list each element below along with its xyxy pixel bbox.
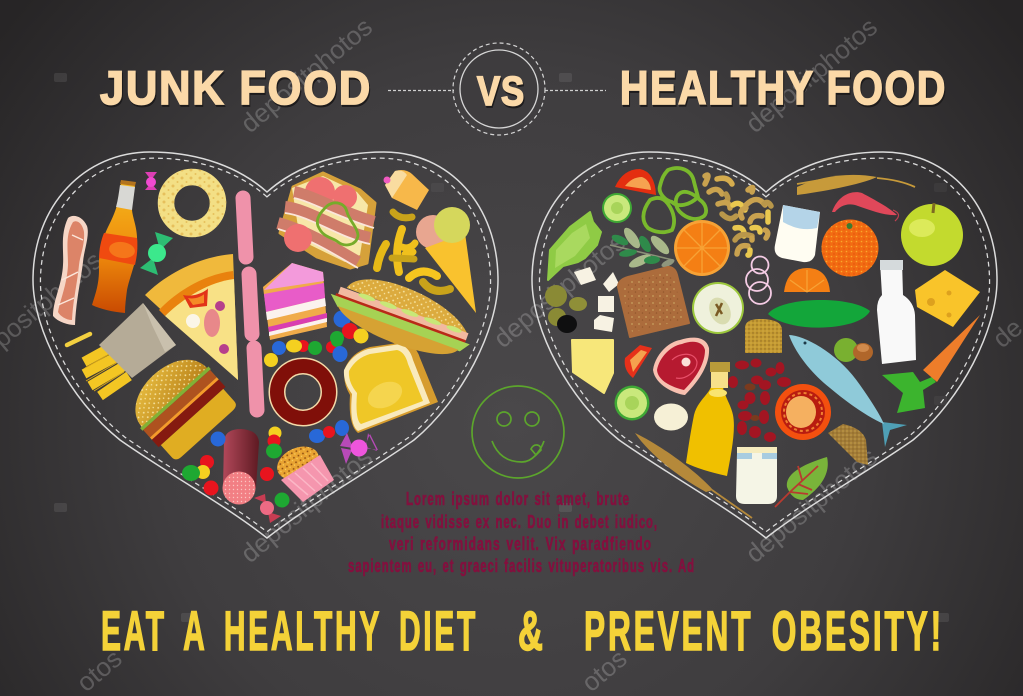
heart outline	[33, 152, 498, 538]
icon: chocolate donut	[277, 366, 329, 418]
icon: cucumber	[768, 300, 870, 328]
lorem ipsum text: Lorem ipsum dolor sit amet, brute	[406, 489, 630, 509]
watermarks: depositphotos	[235, 12, 378, 139]
icon: carrot	[882, 315, 980, 413]
icon: cream cake cube	[384, 170, 429, 210]
watermarks: depositphotos	[740, 442, 883, 569]
icon: soda bottle	[92, 180, 137, 313]
panel: junk food heart	[33, 152, 498, 538]
icon: cucumber slice	[602, 193, 632, 223]
icon: cucumber slice lower	[614, 386, 650, 420]
icon: yogurt jar	[736, 447, 777, 504]
lorem ipsum text: itaque vidisse ex nec. Duo in debet iudico,	[381, 512, 658, 532]
icon: orange slice	[674, 220, 730, 276]
icon: bacon sandwich	[278, 173, 375, 268]
icon: fish	[789, 335, 907, 447]
icon: cupcake	[272, 440, 334, 502]
icon: lettuce leaf	[548, 212, 601, 280]
watermarks: otos	[71, 643, 128, 696]
icon: onion rings	[746, 256, 771, 304]
icon: orange half slice	[784, 268, 830, 292]
slogan: &	[518, 599, 546, 662]
icon: green candy	[140, 232, 173, 275]
icon: tomato wedge	[625, 345, 652, 378]
title: healthy food: HEALTHY FOOD	[620, 61, 947, 114]
lorem ipsum text	[348, 489, 695, 576]
slogan: EAT A HEALTHY DIET	[101, 599, 478, 662]
icon: smiley face	[472, 386, 564, 478]
icon: sausages	[243, 198, 257, 410]
icon: red candy	[254, 494, 281, 523]
panel: healthy food heart	[532, 152, 997, 538]
icon: bread chunk	[828, 424, 868, 465]
icon: hazelnut	[834, 338, 873, 362]
icon: milk bottle	[877, 260, 916, 364]
icon: salami	[222, 429, 259, 504]
icon: milk jar	[775, 205, 820, 262]
icon: red beans	[728, 358, 791, 442]
icon: french fries	[67, 303, 176, 396]
icon: feta cubes	[574, 267, 619, 332]
heart outline	[532, 152, 997, 538]
icon: hamburger	[120, 344, 241, 465]
watermarks: depositphotos	[488, 227, 631, 354]
icon: shrimp	[832, 192, 899, 221]
icon: apple half	[692, 282, 744, 334]
icon: steak	[653, 338, 709, 395]
icon: tomato slice large	[775, 384, 831, 440]
icon: submarine sandwich	[322, 264, 481, 368]
icon: olives	[545, 285, 587, 333]
icon: wheat top	[797, 175, 915, 195]
icon: cheese triangle	[572, 340, 613, 393]
lorem ipsum text: sapientem eu, et graeci facilis vituperatoribus vis. Ad	[348, 556, 695, 576]
vs badge	[388, 43, 606, 135]
icon: ice cream cone	[416, 207, 476, 313]
icon: purple candy	[340, 433, 378, 464]
icon: wholegrain bread	[618, 267, 689, 337]
watermarks: depositphotos	[235, 442, 378, 569]
icon: grain loaf	[745, 319, 782, 353]
icon: oil bottle	[686, 362, 734, 476]
icon: cheese wedge	[915, 270, 980, 327]
icon: green apple	[901, 203, 963, 266]
lorem ipsum text: veri reformidans velit. Vix paradfiendo	[389, 534, 652, 554]
watermarks: depositphotos	[740, 12, 883, 139]
icon: bacon strip	[53, 216, 88, 325]
icon: pink candy	[145, 172, 157, 190]
icon: onion ring	[166, 177, 218, 229]
icon: orange	[822, 220, 878, 276]
icon: buttered toast	[344, 342, 438, 433]
icon: macaroni	[705, 175, 771, 255]
title: junk food: JUNK FOOD	[100, 61, 372, 114]
icon: green pepper rings	[643, 168, 706, 232]
watermarks: otos	[576, 643, 633, 696]
icon: pizza slice	[145, 254, 238, 380]
icon: herb branch	[610, 225, 676, 270]
icon: wheat bottom	[635, 433, 752, 518]
icon: egg	[654, 404, 688, 430]
icon: chard leaf	[775, 457, 828, 507]
vs badge: VS	[477, 68, 525, 114]
icon: cheese puffs	[377, 212, 450, 291]
icon: layered cake	[263, 263, 327, 340]
icon: candy-coated chocolates	[182, 310, 368, 508]
icon: tomato slice top	[615, 169, 656, 195]
